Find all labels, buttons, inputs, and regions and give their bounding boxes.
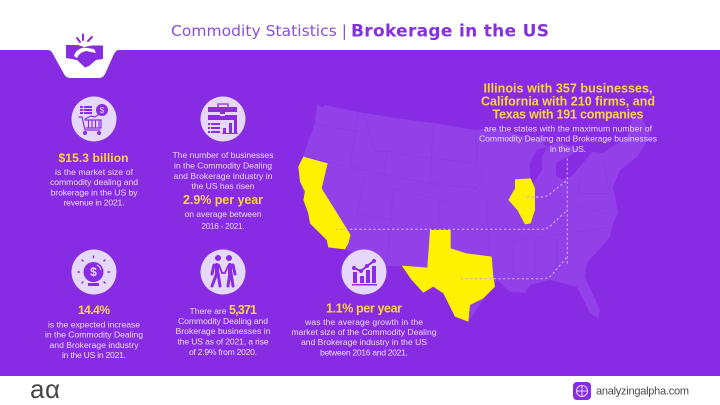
stat: market size growth bbox=[292, 250, 437, 358]
stat: business growth: in the Commodity Dealing bbox=[174, 160, 272, 170]
stat: expected increase: 14.4% bbox=[78, 303, 110, 317]
footer website bbox=[573, 382, 689, 400]
stat: market size growth: between 2016 and 2021. bbox=[320, 348, 408, 358]
icon: cart with dollar: $ bbox=[100, 106, 105, 115]
stat: number of businesses: the US as of 2021, a rise bbox=[178, 336, 269, 346]
stat: business growth: 2.9% per year bbox=[183, 193, 263, 207]
stat: expected increase: in the Commodity Dealing bbox=[45, 330, 143, 340]
stat: business growth: The number of businesses bbox=[172, 150, 274, 160]
stat: expected increase: and Brokerage industry bbox=[50, 340, 139, 350]
stat: market size bbox=[50, 96, 138, 208]
stat: top states: Illinois with 357 businesses, bbox=[484, 82, 652, 96]
stat: top states bbox=[479, 82, 657, 154]
title bbox=[171, 22, 549, 42]
icon: two people shaking hands bbox=[200, 250, 246, 294]
stat: top states: are the states with the maximum number of bbox=[484, 124, 653, 134]
map: United States with highlighted states bbox=[298, 103, 650, 322]
stat: business growth: on average between bbox=[184, 209, 262, 219]
title: Commodity Statistics | bbox=[171, 22, 347, 40]
state: Texas bbox=[402, 230, 495, 322]
map: US outline bbox=[300, 103, 650, 322]
stat: expected increase: is the expected increase bbox=[48, 320, 140, 330]
stat: business growth bbox=[172, 96, 274, 231]
connector lines bbox=[336, 158, 567, 279]
stat: business growth: and Brokerage industry in bbox=[174, 171, 273, 181]
stat: top states: Texas with 191 companies bbox=[492, 108, 644, 122]
stat: number of businesses: Commodity Dealing and bbox=[178, 316, 268, 326]
footer website: analyzingalpha.com bbox=[596, 386, 689, 398]
stat: business growth: the US has risen bbox=[192, 181, 255, 191]
map: great lakes bbox=[530, 147, 592, 184]
icon: globe bbox=[573, 382, 591, 400]
stat: business growth: 2016 - 2021. bbox=[202, 222, 244, 231]
stat: expected increase bbox=[45, 250, 143, 360]
stat: number of businesses bbox=[176, 250, 271, 357]
stat: market size growth: and Brokerage industry in the US bbox=[301, 337, 427, 347]
footer logo: aα bbox=[30, 374, 60, 404]
icon: handshake bbox=[66, 34, 103, 68]
stat: market size: is the market size of bbox=[55, 167, 134, 177]
stat: number of businesses: There are bbox=[190, 306, 227, 316]
stat: market size: $15.3 billion bbox=[58, 151, 128, 165]
state: California bbox=[298, 157, 351, 249]
stat: market size growth: 1.1% per year bbox=[326, 302, 402, 316]
stat: market size: commodity dealing and bbox=[50, 177, 138, 187]
stat: number of businesses: Brokerage businesses in bbox=[176, 326, 271, 336]
icon: crystal ball with dollar: $ bbox=[90, 265, 97, 279]
icon: briefcase and chart bbox=[200, 96, 246, 142]
state: Illinois bbox=[508, 178, 535, 224]
icon: rising bar chart bbox=[342, 250, 386, 294]
stat: top states: Commodity Dealing and Brokerage businesses bbox=[479, 134, 657, 144]
stat: top states: California with 210 firms, and bbox=[481, 94, 655, 108]
map: state borders bbox=[303, 112, 617, 287]
stat: market size: revenue in 2021. bbox=[64, 198, 124, 208]
stat: market size growth: market size of the Commodity Dealing bbox=[292, 327, 437, 337]
stat: expected increase: in the US in 2021. bbox=[62, 350, 126, 360]
stat: top states: in the US. bbox=[550, 144, 586, 154]
stat: market size: brokerage in the US by bbox=[50, 188, 138, 198]
stat: number of businesses: 5,371 bbox=[229, 303, 257, 317]
stat: number of businesses: of 2.9% from 2020. bbox=[189, 347, 257, 357]
stat: market size growth: was the average growth in the bbox=[304, 317, 423, 327]
title: Brokerage in the US bbox=[351, 22, 549, 42]
